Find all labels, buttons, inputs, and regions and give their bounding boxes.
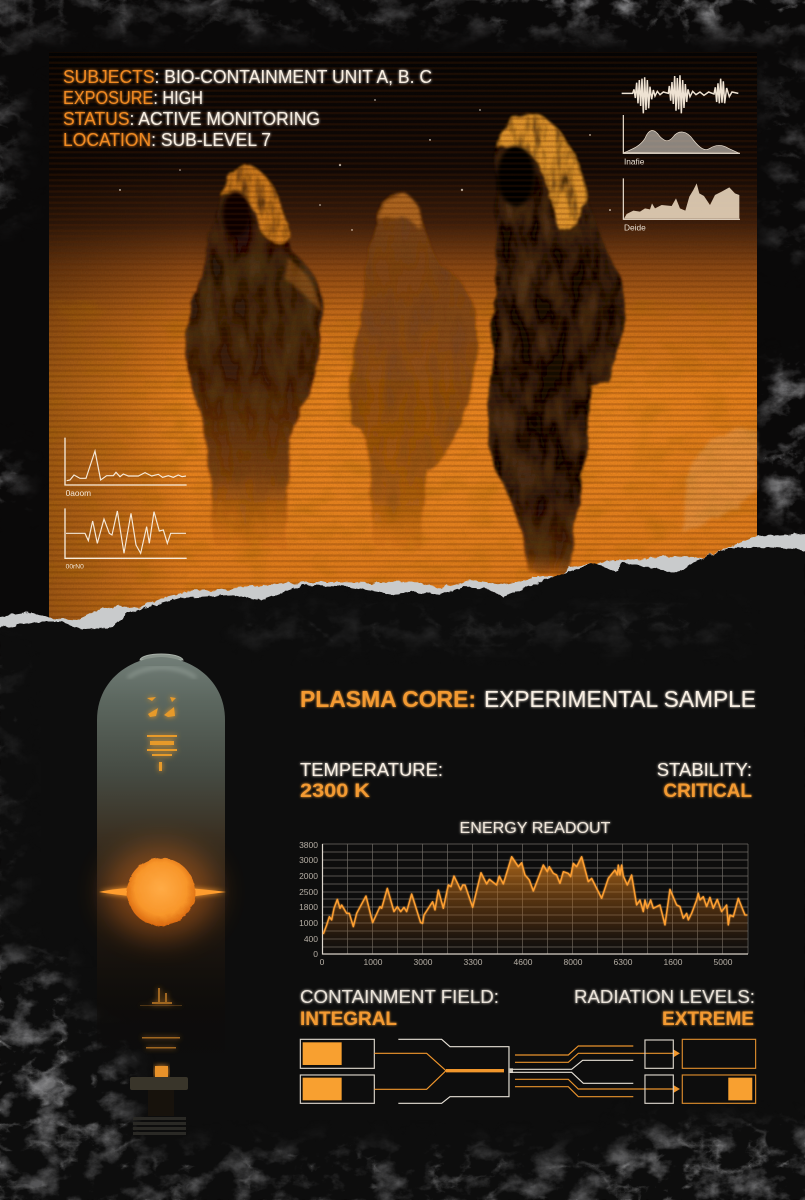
stat: containment field (300, 986, 499, 1030)
upper pulse line (67, 451, 186, 481)
core ambient glow (105, 846, 217, 938)
line: status: STATUS: ACTIVE MONITORING (63, 109, 320, 129)
stat: temperature: 2300 K (300, 781, 370, 802)
panel mottling (49, 300, 757, 624)
arrowheads (673, 1049, 680, 1093)
energy series (323, 857, 747, 954)
x axis labels: 1600 (664, 957, 683, 967)
y axis labels: 3800 (299, 840, 318, 850)
lower noisy line (66, 511, 186, 553)
waveform (622, 75, 738, 113)
right figure hood highlight (497, 113, 587, 232)
x axis labels: 8000 (564, 957, 583, 967)
x axis labels: 4600 (514, 957, 533, 967)
figure: left hazmat suit (186, 165, 323, 548)
chart grid (322, 844, 748, 954)
area chart axes (623, 115, 740, 153)
white split lines (510, 1060, 633, 1083)
stat: stability: CRITICAL (663, 781, 752, 802)
flow diagram: containment to radiation (300, 1039, 756, 1103)
junction node (508, 1068, 513, 1073)
base glow block (155, 1066, 168, 1077)
panel base gradient (49, 52, 757, 624)
dust specks (119, 99, 611, 231)
stat: containment field: INTEGRAL (300, 1009, 397, 1030)
middle figure hood glow (378, 192, 422, 232)
stat: containment field: CONTAINMENT FIELD: (300, 986, 499, 1007)
left figure hood highlight (221, 165, 290, 243)
white housing bracket (398, 1039, 509, 1103)
glowing line (323, 857, 747, 934)
bar chart axes (623, 178, 740, 219)
mini charts: top right (622, 75, 740, 232)
lower black torn paper sheet (0, 547, 805, 1200)
residue stain right side (682, 429, 757, 532)
label: Deide: Deide (624, 222, 646, 232)
film grain (49, 52, 757, 624)
x axis labels: 3300 (464, 957, 483, 967)
output fill (728, 1078, 752, 1100)
subject data text block (63, 67, 432, 150)
base collar (130, 1077, 188, 1090)
label: 00rN0: 00rN0 (66, 563, 84, 570)
stat: temperature (300, 759, 443, 802)
orange output boxes (682, 1039, 756, 1103)
upper chart axes (65, 438, 187, 485)
left input boxes (300, 1039, 374, 1103)
area fill under line (323, 857, 747, 954)
y axis labels: 0 (313, 949, 318, 959)
base neck (148, 1090, 174, 1116)
y axis labels: 1000 (299, 918, 318, 928)
spiky area chart: Deide (624, 183, 739, 219)
line: location: LOCATION: SUB-LEVEL 7 (63, 130, 271, 150)
heading: experimental sample: EXPERIMENTAL SAMPLE (484, 686, 756, 712)
lower chart axes (65, 508, 187, 558)
orange split lines (515, 1046, 675, 1097)
left figure face shadow (222, 191, 250, 237)
figure: right hazmat suit (488, 113, 625, 578)
stat: stability (657, 759, 752, 802)
photo panel: hazmat figures in orange haze (49, 52, 757, 624)
stat: stability: STABILITY: (657, 759, 752, 780)
x axis labels: 6300 (614, 957, 633, 967)
area chart: Inafie (624, 130, 739, 153)
chart title: energy readout: ENERGY READOUT (460, 820, 611, 837)
lower filament (140, 988, 182, 1048)
stat: radiation levels: RADIATION LEVELS: (574, 986, 755, 1007)
plasma flare band (99, 886, 226, 899)
y axis labels: 2000 (299, 871, 318, 881)
x axis labels (320, 957, 733, 967)
figure: middle hazmat suit (352, 192, 478, 548)
stat: radiation levels: EXTREME (662, 1009, 754, 1030)
orange merge lines (374, 1053, 504, 1089)
plasma core orb (127, 858, 195, 926)
line: exposure: EXPOSURE: HIGH (63, 88, 203, 108)
scan lines (49, 52, 757, 624)
label: 0aoom: 0aoom (66, 488, 91, 498)
x axis labels: 1000 (364, 957, 383, 967)
y axis labels: 3000 (299, 855, 318, 865)
capsule cap rim (140, 654, 183, 660)
mini charts: lower left (65, 438, 187, 570)
left input fills (303, 1042, 342, 1100)
plasma capsule (97, 654, 226, 1135)
left figure shoulder light (285, 260, 320, 310)
base foot (133, 1117, 186, 1135)
upper filament (147, 697, 177, 771)
haze glow behind figures (160, 320, 680, 540)
heading: plasma core: PLASMA CORE: (300, 686, 476, 712)
panel left vignette (49, 52, 190, 624)
x axis labels: 3000 (414, 957, 433, 967)
chart axes (322, 844, 748, 954)
right figure face shadow (497, 146, 535, 206)
line chart: energy readout (299, 840, 748, 967)
torn paper: white ripped edge (0, 533, 805, 640)
white valve boxes (645, 1040, 673, 1103)
label: Inafie: Inafie (624, 156, 645, 166)
x axis labels: 0 (320, 957, 325, 967)
stat: temperature: TEMPERATURE: (300, 759, 443, 780)
y axis labels: 1800 (299, 902, 318, 912)
dome highlight (128, 668, 196, 678)
y axis labels: 2500 (299, 887, 318, 897)
line: subjects: SUBJECTS: BIO-CONTAINMENT UNIT A, B. C (63, 67, 432, 87)
x axis labels: 5000 (714, 957, 733, 967)
y axis labels (299, 840, 318, 959)
stat: radiation levels (574, 986, 755, 1030)
y axis labels: 400 (304, 934, 318, 944)
lower sheet texture (0, 604, 805, 1200)
glass tube body (97, 657, 225, 1060)
